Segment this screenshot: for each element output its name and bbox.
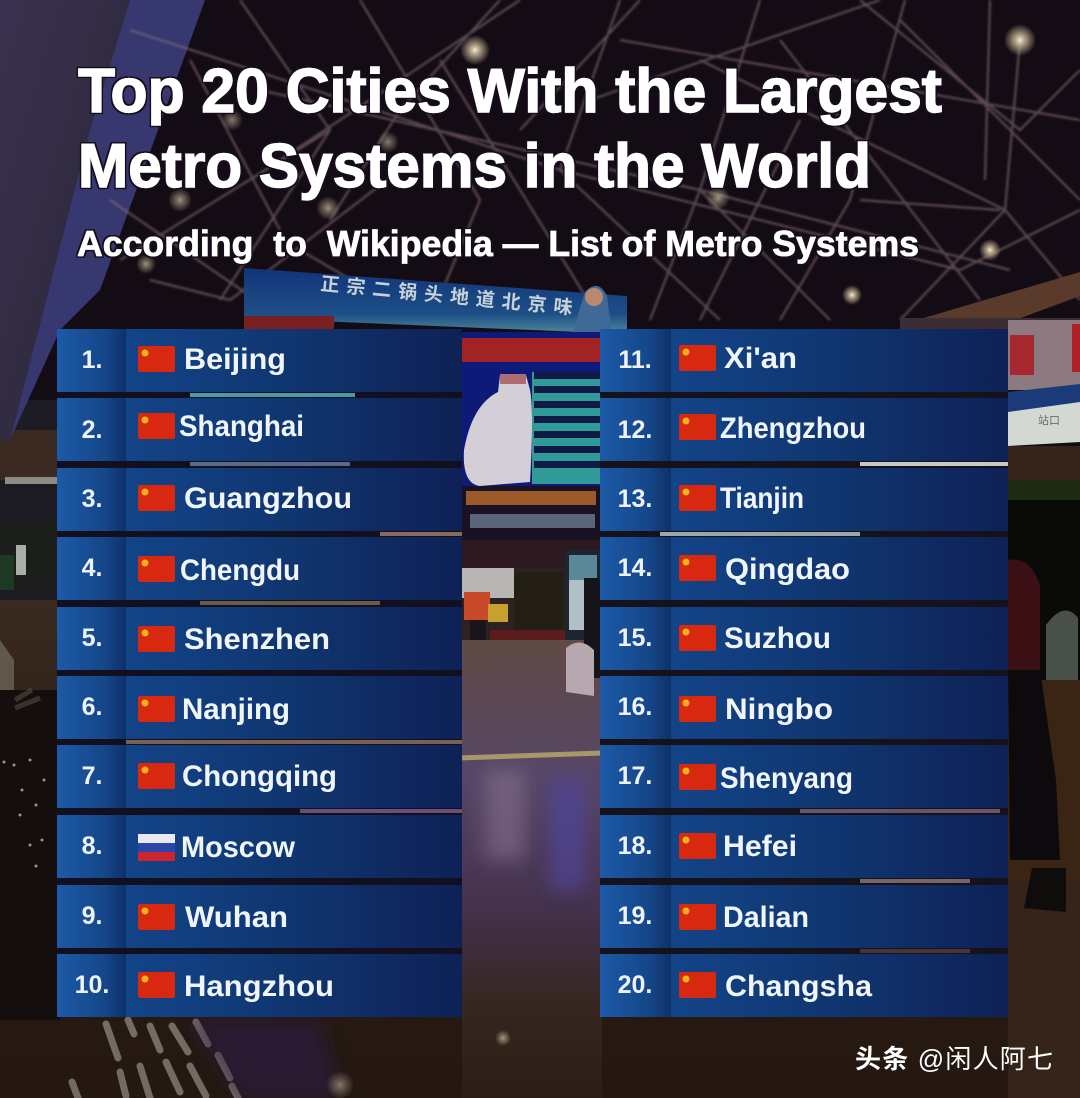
row 4 Chengdu (57, 537, 462, 600)
row 3 Guangzhou (57, 468, 462, 531)
row 2 Shanghai: Shanghai (179, 410, 304, 443)
row 16 Ningbo: 16. (618, 693, 652, 721)
blue banner sign (244, 268, 627, 334)
row 13 Tianjin: Tianjin (720, 482, 804, 515)
row 11 Xi'an: Xi'an (724, 342, 797, 375)
row 4 Chengdu: Chengdu (180, 554, 300, 587)
row 2 Shanghai (57, 398, 462, 461)
row 14 Qingdao (600, 537, 1008, 600)
row 1 Beijing: Beijing (184, 343, 286, 376)
row 11 Xi'an: 11. (618, 346, 652, 374)
row 15 Suzhou (600, 607, 1008, 670)
row 20 Changsha (600, 954, 1008, 1017)
row 19 Dalian: Dalian (723, 901, 809, 934)
row 16 Ningbo (600, 676, 1008, 739)
row 12 Zhengzhou (600, 398, 1008, 461)
row 14 Qingdao: 14. (618, 554, 652, 582)
row 10 Hangzhou: Hangzhou (184, 970, 334, 1003)
row 5 Shenzhen: Shenzhen (184, 623, 330, 656)
row 9 Wuhan (57, 885, 462, 948)
gaps behind rows with photo fragments (57, 329, 1008, 1017)
left wall and shops (0, 400, 60, 1020)
row 5 Shenzhen (57, 607, 462, 670)
row 5 Shenzhen: 5. (82, 624, 102, 652)
title (78, 57, 942, 201)
right ranking column (600, 329, 1008, 1017)
row 17 Shenyang: Shenyang (720, 762, 853, 795)
center floor reflection (462, 578, 602, 1098)
row 7 Chongqing: Chongqing (182, 760, 337, 793)
ceiling truss (110, 0, 1080, 330)
row 13 Tianjin (600, 468, 1008, 531)
row 10 Hangzhou: 10. (75, 971, 109, 999)
row 8 Moscow (57, 815, 462, 878)
row 7 Chongqing: 7. (82, 762, 102, 790)
row 17 Shenyang (600, 745, 1008, 808)
row 1 Beijing (57, 329, 462, 392)
row 3 Guangzhou: Guangzhou (184, 482, 352, 515)
row 8 Moscow: Moscow (181, 831, 296, 864)
row 20 Changsha: Changsha (725, 970, 872, 1003)
blue banner sign: 正宗二锅头地道北京味 (320, 272, 581, 320)
row 15 Suzhou: Suzhou (724, 622, 831, 655)
row 3 Guangzhou: 3. (82, 485, 102, 513)
row 6 Nanjing: 6. (82, 693, 102, 721)
row 13 Tianjin: 13. (618, 485, 652, 513)
row 15 Suzhou: 15. (618, 624, 652, 652)
shop and people (462, 540, 602, 660)
row 9 Wuhan: Wuhan (185, 901, 288, 934)
row 12 Zhengzhou: Zhengzhou (720, 412, 866, 445)
row 4 Chengdu: 4. (82, 554, 102, 582)
row 16 Ningbo: Ningbo (725, 693, 833, 726)
row 2 Shanghai: 2. (82, 416, 102, 444)
row 6 Nanjing: Nanjing (182, 693, 290, 726)
subtitle: According to Wikipedia — List of Metro Systems (77, 223, 919, 264)
row 7 Chongqing (57, 745, 462, 808)
row 1 Beijing: 1. (82, 346, 102, 374)
title: Metro Systems in the World (78, 132, 871, 201)
row 17 Shenyang: 17. (618, 762, 652, 790)
row 11 Xi'an (600, 329, 1008, 392)
row 14 Qingdao: Qingdao (725, 553, 850, 586)
left ranking column (57, 329, 462, 1017)
row 20 Changsha: 20. (618, 971, 652, 999)
title: Top 20 Cities With the Largest (78, 57, 942, 126)
row 18 Hefei (600, 815, 1008, 878)
right side signage and figure (1008, 320, 1080, 1098)
row 18 Hefei: Hefei (723, 830, 797, 863)
departure board with bottle ad (462, 332, 602, 542)
bottom-left floor tiles (72, 1020, 238, 1098)
row 10 Hangzhou (57, 954, 462, 1017)
row 9 Wuhan: 9. (82, 902, 102, 930)
watermark: 头条 @闲人阿七 (855, 1044, 1053, 1074)
row 19 Dalian (600, 885, 1008, 948)
right side signage and figure: 站口 (1038, 413, 1060, 427)
row 19 Dalian: 19. (618, 902, 652, 930)
row 18 Hefei: 18. (618, 832, 652, 860)
row 8 Moscow: 8. (82, 832, 102, 860)
row 6 Nanjing (57, 676, 462, 739)
row 12 Zhengzhou: 12. (618, 416, 652, 444)
